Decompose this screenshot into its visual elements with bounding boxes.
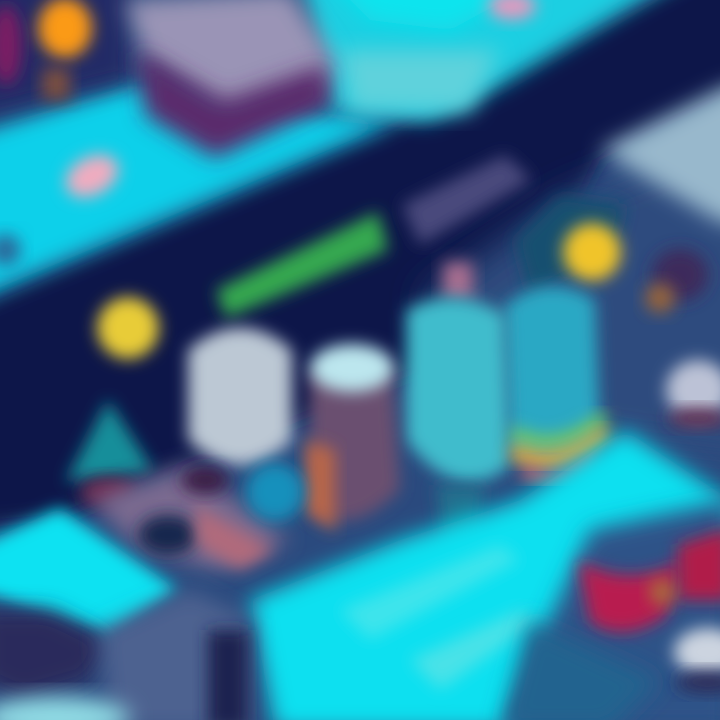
- bottom edge blue wedge: [500, 620, 660, 720]
- teal dome right: [515, 195, 625, 295]
- pale floor stripes: [340, 545, 520, 640]
- dish base: [676, 671, 720, 693]
- dark centre port: [138, 515, 198, 555]
- main cyan floor: [250, 430, 720, 720]
- cylinder two top: [310, 344, 394, 392]
- pale panel: [340, 50, 500, 112]
- red bowl: [578, 560, 682, 632]
- dark blob at left edge: [0, 234, 21, 266]
- upper left cyan platform: [0, 85, 395, 300]
- bowl orange accent: [649, 579, 675, 605]
- pink stem above bottle: [443, 262, 473, 300]
- top left dark corner: [0, 0, 130, 120]
- red bowl right: [678, 528, 720, 600]
- second pale stripe: [410, 610, 540, 690]
- small orange object: [645, 283, 675, 313]
- teal triangle: [66, 400, 154, 482]
- dark red joint: [181, 466, 229, 494]
- pink top marker: [488, 0, 536, 20]
- pink machine base: [90, 465, 290, 570]
- orange band: [512, 432, 608, 460]
- yellow coin left: [97, 297, 159, 359]
- brightest cyan top strip: [320, 0, 560, 30]
- bottom left pale platform: [0, 696, 130, 720]
- rainbow bands: [512, 416, 608, 478]
- yellow coin right: [563, 223, 621, 281]
- green band: [512, 416, 606, 442]
- grey purple bar: [402, 155, 532, 245]
- light cylinder body: [188, 328, 292, 465]
- orange stem: [42, 68, 70, 100]
- teal bottle right: [505, 286, 600, 468]
- dark column: [208, 630, 248, 720]
- right bowl base: [668, 408, 720, 428]
- lower slate area: [420, 120, 720, 460]
- top grey machine: [125, 0, 335, 120]
- lower right slate floor: [510, 500, 720, 720]
- purple machine base: [138, 50, 330, 158]
- bottle foot: [436, 485, 484, 545]
- cylinder two body: [310, 370, 400, 521]
- dark diagonal band: [0, 0, 720, 530]
- salmon wedge: [195, 505, 275, 570]
- right grey bowl: [666, 360, 720, 420]
- pink platform marker: [58, 146, 126, 206]
- bottom left dark machine: [0, 610, 110, 700]
- magenta left object: [0, 5, 22, 85]
- green bar: [216, 212, 388, 318]
- right dark object: [652, 249, 708, 301]
- blue ball: [246, 463, 304, 521]
- orange glow: [38, 0, 92, 58]
- teal bottle left: [406, 298, 510, 483]
- grey machine column: [100, 590, 250, 720]
- bottom left cyan platform: [0, 508, 178, 636]
- bottom right white dish: [674, 628, 720, 676]
- right pale panel: [600, 85, 720, 228]
- red base under triangle: [80, 478, 136, 506]
- pink band: [522, 458, 598, 478]
- top centre cyan platform: [300, 0, 690, 120]
- cylinder two orange stripe: [306, 440, 335, 532]
